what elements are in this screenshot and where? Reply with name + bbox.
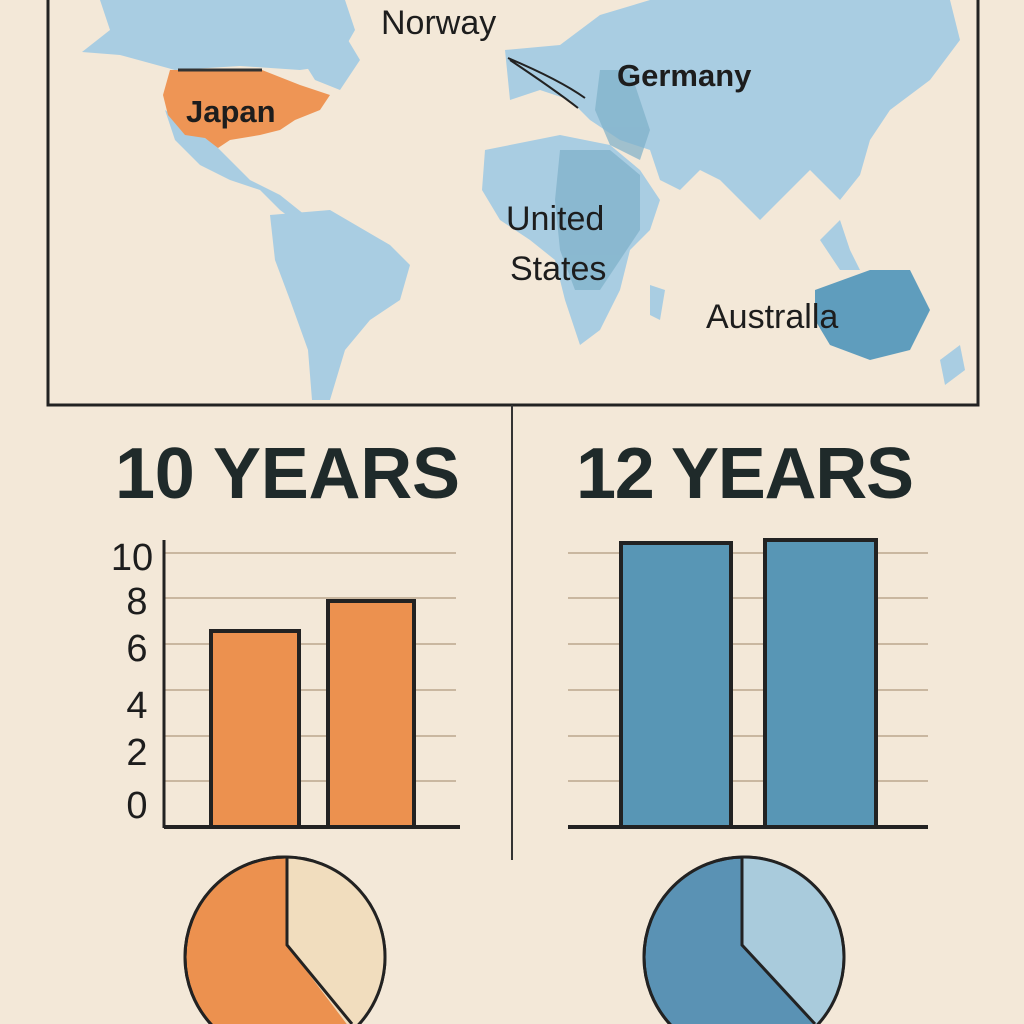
bar chart: 10 years: 10 — [111, 537, 153, 579]
bar chart: 10 years: 6 — [126, 628, 148, 670]
map labels: Australla — [706, 298, 838, 336]
heading: 10 years: 10 YEARS — [115, 434, 460, 514]
map labels: United — [506, 200, 604, 238]
Australia (darker blue) — [815, 270, 930, 360]
bar chart: 10 years: 8 — [126, 581, 148, 623]
bar chart: 10 years: 4 — [126, 685, 148, 727]
map labels: Norway — [381, 4, 496, 42]
arrow lines near Norway — [508, 58, 585, 108]
bar chart: 12 years — [568, 540, 928, 827]
darker shaded regions — [555, 70, 650, 290]
pie chart: 10 years — [185, 857, 385, 1024]
bar chart: 10 years: 2 — [126, 732, 148, 774]
map labels: States — [510, 250, 606, 288]
map land — [82, 0, 965, 400]
heading: 12 years: 12 YEARS — [576, 434, 914, 514]
bar chart: 10 years: 0 — [126, 785, 148, 827]
divider — [511, 405, 513, 860]
panel: world map — [48, 0, 978, 405]
map frame — [48, 0, 978, 405]
map labels: Germany — [617, 58, 752, 93]
map labels: Japan — [186, 94, 276, 129]
bar chart: 10 years — [111, 537, 460, 828]
map labels — [186, 4, 838, 336]
highlighted USA region (orange) — [163, 70, 330, 148]
pie chart: 12 years — [644, 857, 844, 1024]
